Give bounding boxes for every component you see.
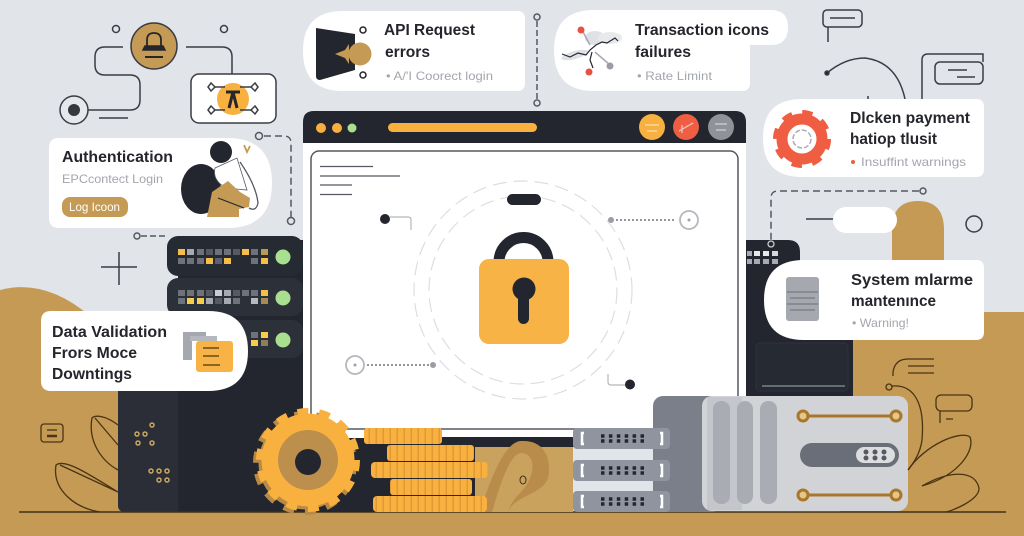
card: system maintenance: mantenınce xyxy=(851,293,936,310)
card: API request errors: API Request xyxy=(384,22,476,39)
right server tower xyxy=(746,240,853,396)
card: payment: Insuffint warnings xyxy=(861,155,966,169)
address bar xyxy=(388,123,537,132)
button: Log Icoon xyxy=(69,200,120,214)
card: transaction failures xyxy=(554,10,788,91)
documents icon xyxy=(183,332,233,372)
red gear icon xyxy=(777,114,827,164)
card: data validation xyxy=(41,311,248,391)
window control dots xyxy=(316,123,356,133)
small rack units xyxy=(573,428,670,512)
large network device xyxy=(653,396,908,512)
card: authentication xyxy=(49,138,272,228)
card: authentication: EPCcontect Login xyxy=(62,172,163,186)
padlock xyxy=(479,237,569,344)
card: authentication: Authentication xyxy=(62,149,173,166)
dashed rings xyxy=(414,181,632,399)
card: data validation: Data Validation xyxy=(52,324,167,341)
card: data validation: Frors Moce xyxy=(52,345,137,362)
dark base behind coins xyxy=(303,437,475,512)
card: system maintenance: • Warning! xyxy=(852,316,909,330)
main browser window xyxy=(303,111,746,447)
card: payment: Dlcken payment xyxy=(850,110,971,127)
card: transaction failures: Transaction icons xyxy=(635,22,769,39)
rods xyxy=(798,411,901,500)
card: API request errors xyxy=(303,11,525,91)
hand holding card xyxy=(833,201,944,260)
left decorative leaves and icon xyxy=(41,416,118,512)
text placeholder lines xyxy=(320,166,400,194)
card: payment: hatiop tlusit xyxy=(850,131,938,148)
card: payment xyxy=(763,99,984,177)
right decorative line art xyxy=(886,359,979,512)
card: system maintenance: System mlarme xyxy=(851,272,973,289)
header status icons xyxy=(639,114,734,140)
card: API request errors: • A/'I Coorect login xyxy=(386,69,493,83)
hook shape and backdrop xyxy=(475,441,573,512)
button xyxy=(62,197,128,217)
card: transaction failures: • Rate Limint xyxy=(637,69,713,83)
API icon xyxy=(316,27,372,80)
card: API request errors: errors xyxy=(385,44,430,61)
top-right line icons xyxy=(806,10,983,232)
person illustration xyxy=(181,141,258,217)
left server tower xyxy=(118,236,303,512)
top-left login flow diagram xyxy=(60,23,276,124)
tan ground and hills xyxy=(0,287,1024,536)
connector nodes xyxy=(346,211,698,390)
card: data validation: Downtings xyxy=(52,366,132,383)
port pill xyxy=(800,443,899,467)
large gear xyxy=(259,414,354,509)
pill xyxy=(507,194,541,205)
baseline xyxy=(19,511,1006,513)
card: transaction failures: failures xyxy=(635,44,691,61)
server icon xyxy=(786,277,819,321)
network icon xyxy=(560,26,622,76)
card: system maintenance xyxy=(764,260,984,340)
connector lines xyxy=(101,14,926,285)
coin stacks xyxy=(364,428,488,512)
